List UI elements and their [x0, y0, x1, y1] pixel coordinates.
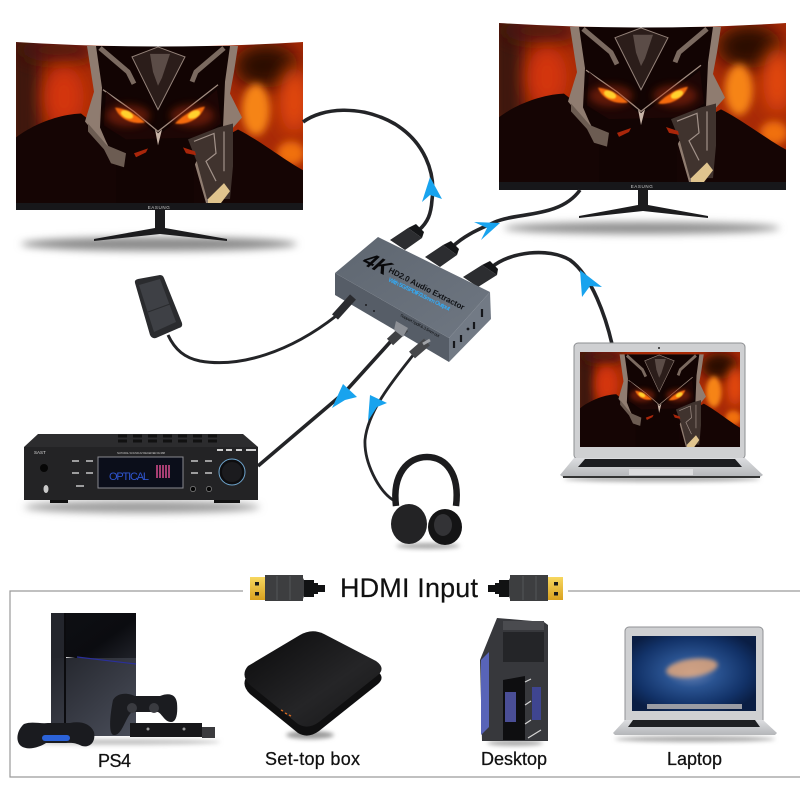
label 4K: 4K — [356, 249, 399, 279]
amplifier shadow — [24, 501, 260, 513]
headphones — [391, 457, 462, 549]
monitor screen — [16, 42, 303, 203]
monitor stand — [579, 188, 708, 218]
right ear cushion — [434, 514, 452, 536]
amplifier front — [24, 447, 258, 500]
amplifier — [24, 434, 260, 513]
cable: extractor to amplifier — [258, 340, 392, 466]
icon: power adapter — [135, 275, 182, 338]
right ear cup — [428, 509, 462, 545]
monitor shadow — [504, 222, 780, 234]
ps4 camera stand — [202, 727, 215, 738]
audio plug: optical — [390, 321, 408, 342]
laptop screen — [580, 352, 740, 447]
hdmi plug: left monitor — [390, 224, 424, 250]
laptop galaxy screen — [632, 636, 756, 711]
laptop trackpad — [629, 469, 693, 475]
device: PS4 — [17, 613, 220, 748]
laptop base — [613, 720, 777, 735]
amplifier power button — [40, 464, 48, 472]
tower front grille — [503, 632, 544, 662]
device side ports — [454, 309, 482, 348]
heading: HDMI Input: HDMI Input — [340, 573, 478, 603]
laptop dock — [647, 704, 742, 709]
frame: HDMI input section — [10, 591, 800, 777]
amplifier model line: NATURAL SOUND AV RECEIVER AV-388 — [117, 451, 165, 455]
label product name: HD2.0 Audio Extractor — [387, 266, 466, 312]
laptop bottom edge — [563, 476, 760, 478]
ps4 upper body — [65, 613, 136, 664]
monitor brand: EASUNG — [148, 205, 170, 210]
arrow: to left monitor — [422, 177, 442, 202]
monitor bezel — [16, 203, 303, 210]
left ear cup — [391, 504, 427, 544]
laptop lid — [625, 627, 763, 725]
ps4 controller light — [42, 735, 70, 741]
galaxy core — [665, 655, 719, 681]
tower lower dark panel — [503, 676, 525, 740]
cable: extractor to headphones — [365, 354, 414, 500]
amplifier bluetooth icon — [44, 485, 48, 493]
device: desktop tower — [480, 618, 548, 746]
laptop base — [560, 458, 763, 477]
tower front window left — [505, 692, 516, 722]
monitor screen — [499, 23, 786, 182]
label feature line: With 5G/SPDIF/3.5mm Output — [387, 277, 451, 313]
tower body — [480, 618, 548, 741]
laptop lid — [574, 343, 745, 459]
device side hole — [467, 328, 469, 330]
amplifier level bars — [157, 465, 169, 478]
label: Laptop: Laptop — [667, 749, 722, 769]
laptop shadow — [564, 476, 760, 482]
label: PS4: PS4 — [98, 751, 131, 771]
cable: laptop to extractor — [492, 253, 612, 344]
amplifier brand: SAST — [34, 450, 46, 455]
audio plug: 3.5mm — [412, 340, 430, 355]
icon: HDMI connector right — [488, 575, 563, 601]
ps4 back controller sticks — [127, 703, 159, 713]
icon: HDMI connector left — [250, 575, 325, 601]
ps4 camera — [130, 723, 202, 737]
ps4 shadow — [20, 739, 220, 745]
amplifier display — [98, 457, 183, 488]
power plug — [335, 297, 353, 317]
amplifier top — [24, 434, 258, 447]
monitor brand: EASUNG — [631, 184, 653, 189]
amplifier badges — [217, 449, 256, 451]
headphone shadow — [396, 543, 460, 549]
arrow: to right monitor — [474, 222, 500, 240]
headband — [395, 457, 457, 506]
box leds — [281, 710, 291, 716]
label: Set-top box: Set-top box — [265, 749, 360, 769]
amplifier jacks — [190, 486, 212, 492]
ps4 back controller — [110, 694, 177, 735]
cable: power adapter to extractor — [168, 316, 336, 363]
amplifier display text: OPTICAL — [109, 471, 149, 483]
monitor bezel — [499, 182, 786, 190]
box shadow — [286, 731, 334, 739]
hdmi plug: laptop — [463, 261, 498, 287]
tower top bay — [503, 621, 544, 630]
ps4 camera lenses — [146, 728, 186, 730]
laptop shadow — [615, 736, 775, 742]
device front panel — [335, 273, 449, 362]
device side panel — [449, 292, 491, 362]
right monitor — [489, 13, 791, 234]
device front dots — [365, 305, 375, 311]
cable: right monitor to extractor — [452, 190, 580, 247]
amplifier knob — [219, 459, 245, 485]
left monitor — [6, 32, 308, 251]
extractor device — [335, 237, 491, 362]
tower front window right — [532, 687, 541, 720]
device: set-top box — [244, 631, 382, 739]
monitor shadow — [21, 237, 297, 251]
hdmi plug: right monitor — [425, 241, 459, 267]
ps4 lower body — [51, 658, 136, 736]
tower shadow — [487, 740, 543, 746]
label: Desktop: Desktop — [481, 749, 547, 769]
laptop camera — [658, 347, 660, 349]
ps4 blue light — [77, 657, 136, 664]
ps4 groove — [64, 613, 66, 735]
box side — [244, 640, 382, 736]
laptop — [560, 343, 763, 482]
laptop keyboard — [628, 720, 760, 727]
monitor stand — [94, 208, 227, 241]
amplifier feet — [50, 499, 240, 503]
label support line: Support Spdif & 3.5mm out — [400, 313, 441, 339]
device top face — [335, 237, 490, 338]
arrow: to headphones — [368, 395, 387, 421]
box top — [244, 631, 382, 727]
arrow: from laptop — [580, 270, 602, 297]
amplifier vents — [118, 436, 217, 441]
tower side window — [481, 652, 489, 735]
amplifier buttons — [72, 461, 212, 486]
tower trim — [525, 679, 541, 738]
ps4 front controller — [17, 722, 94, 748]
laptop keyboard — [578, 459, 742, 467]
device: laptop — [613, 627, 777, 742]
cable: left monitor to extractor — [303, 110, 433, 230]
arrow: to amplifier — [332, 384, 357, 408]
ps4 left strip — [51, 613, 65, 658]
